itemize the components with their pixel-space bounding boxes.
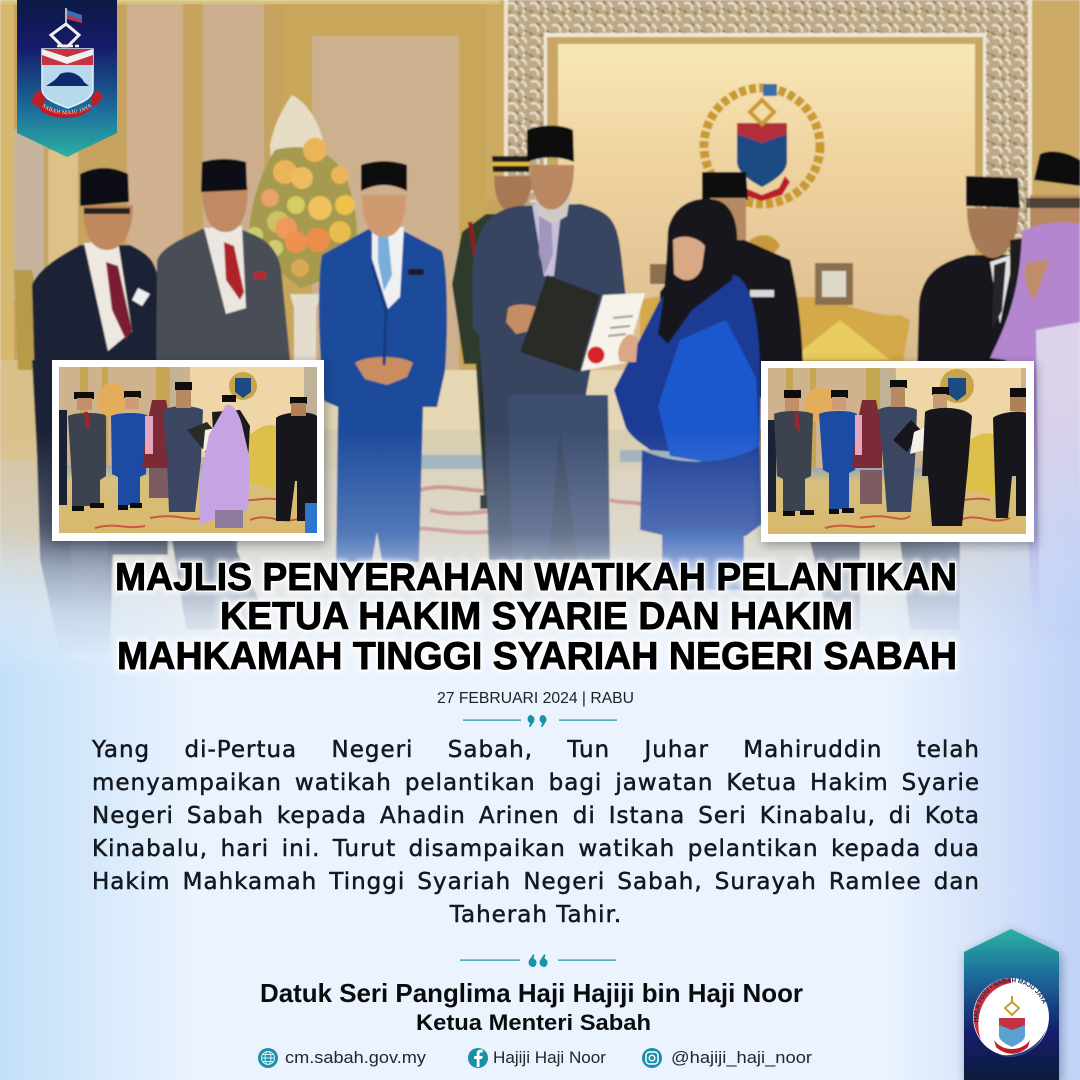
round seal badge: HALA TUJU • SABAH MAJU JAYA	[973, 978, 1046, 1022]
body paragraph: Kinabalu, hari ini. Turut disampaikan watikah pelantikan kepada dua	[92, 836, 980, 862]
body paragraph: Yang di-Pertua Negeri Sabah, Tun Juhar Mahiruddin telah	[92, 737, 980, 763]
icon: facebook	[468, 1048, 488, 1068]
governor (dark grey-blue suit)	[472, 126, 629, 560]
dark side figures and legs at left bottom	[32, 360, 960, 630]
bottom-right emblem banner	[960, 927, 1068, 1080]
ribbon: SABAH MAJU JAYA	[42, 104, 92, 114]
sofa and portraits	[639, 234, 910, 361]
minister title: Ketua Menteri Sabah	[416, 1010, 651, 1035]
icon: instagram	[642, 1048, 662, 1068]
contact: facebook: Hajiji Haji Noor	[493, 1048, 606, 1067]
body paragraph: Taherah Tahir.	[450, 902, 622, 928]
shield	[42, 49, 93, 108]
ribbon	[32, 90, 103, 118]
body paragraph: menyampaikan watikah pelantikan bagi jawatan Ketua Hakim Syarie	[92, 770, 980, 796]
man 2 (grey suit)	[155, 159, 290, 629]
divider with closing quote mark	[463, 715, 617, 727]
body paragraph: Negeri Sabah kepada Ahadin Arinen di Istana Seri Kinabalu, di Kota	[92, 803, 980, 829]
flower arrangement	[248, 94, 358, 360]
round seal badge	[973, 978, 1049, 1057]
body paragraph: Hakim Mahkamah Tinggi Syariah Negeri Sabah, Surayah Ramlee dan	[92, 869, 980, 895]
left thumbnail photo	[52, 360, 324, 541]
side glow	[0, 400, 1080, 1080]
certificate folder and letter	[520, 275, 645, 372]
contact: website: cm.sabah.gov.my	[285, 1048, 427, 1067]
icon: globe	[258, 1048, 278, 1068]
main title: MAJLIS PENYERAHAN WATIKAH PELANTIKAN	[115, 556, 957, 599]
main title: MAHKAMAH TINGGI SYARIAH NEGERI SABAH	[117, 635, 957, 678]
main title: MAJLIS PENYERAHAN WATIKAH PELANTIKAN	[115, 556, 957, 599]
main title: MAHKAMAH TINGGI SYARIAH NEGERI SABAH	[117, 635, 957, 678]
man at far right with glasses	[1009, 150, 1080, 274]
main title	[115, 556, 957, 678]
right thumbnail photo	[761, 361, 1034, 542]
minister name: Datuk Seri Panglima Haji Hajiji bin Haji Noor	[260, 978, 803, 1008]
fade overlay	[0, 430, 1080, 660]
man on the right (black suit)	[916, 175, 1021, 361]
man 1 (navy suit)	[32, 168, 168, 655]
main title: KETUA HAKIM SYARIE DAN HAKIM	[220, 595, 853, 638]
man behind the recipient (black suit)	[660, 172, 803, 400]
main title: KETUA HAKIM SYARIE DAN HAKIM	[220, 595, 853, 638]
wall panels	[0, 0, 1080, 660]
man 3 (blue suit)	[319, 161, 447, 562]
main title: MAHKAMAH TINGGI SYARIAH NEGERI SABAH	[117, 635, 957, 678]
divider with opening quote mark	[460, 954, 616, 967]
contact: instagram: @hajiji_haji_noor	[671, 1048, 812, 1067]
main title: MAJLIS PENYERAHAN WATIKAH PELANTIKAN	[115, 556, 957, 599]
main title: KETUA HAKIM SYARIE DAN HAKIM	[220, 595, 853, 638]
date: 27 FEBRUARI 2024 | RABU	[437, 690, 634, 707]
background photo: ceremony at Istana	[0, 0, 1080, 660]
woman in lilac scarf	[989, 222, 1080, 591]
left wall ornament and chair	[13, 269, 35, 370]
recipient: woman in blue	[614, 199, 762, 590]
flag and arch	[51, 8, 82, 46]
top-left emblem banner	[17, 0, 117, 157]
guard (olive uniform)	[452, 156, 532, 509]
wall emblem with wreath	[704, 84, 820, 204]
